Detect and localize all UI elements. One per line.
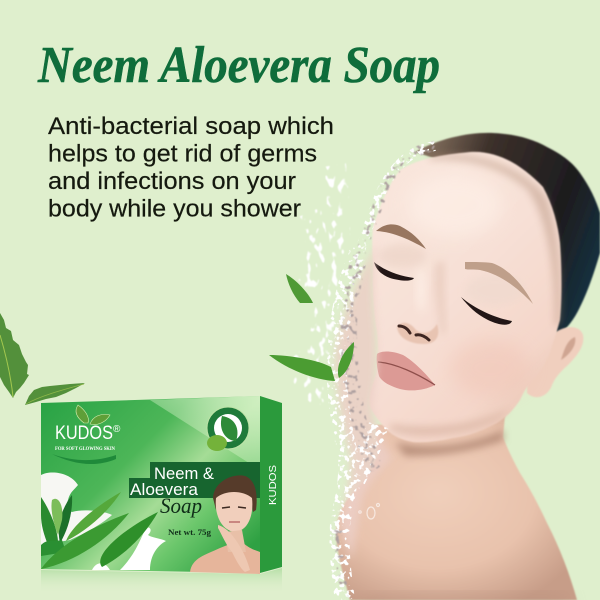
left closed eye	[374, 262, 414, 281]
right closed eye	[461, 297, 512, 325]
nose shade	[435, 262, 446, 335]
product name banner	[129, 462, 260, 498]
water highlights	[337, 146, 435, 600]
inner ear shade	[561, 337, 575, 360]
tagline swoosh	[52, 454, 116, 464]
lips	[377, 351, 435, 390]
chin shade	[390, 408, 510, 436]
nose underside	[397, 323, 438, 344]
shoulder and neck	[336, 415, 577, 600]
neem leaf: floating large	[269, 355, 335, 381]
tagline: FOR SOFT GLOWING SKIN	[55, 447, 115, 452]
milk splash	[41, 472, 112, 545]
soap box product	[41, 396, 282, 594]
left eye socket shade	[378, 244, 426, 268]
description text: Anti-bacterial soap which	[48, 113, 334, 140]
water dark specks	[338, 146, 435, 600]
registered mark: ®	[113, 424, 121, 435]
box side face	[260, 396, 282, 573]
neem leaf: floating top	[286, 274, 313, 303]
box reflection	[41, 568, 282, 594]
product name line two: Aloevera	[130, 480, 199, 499]
forehead highlight	[407, 173, 503, 237]
right eye socket shade	[465, 275, 525, 305]
water splash	[290, 146, 435, 600]
net weight: Net wt. 75g	[168, 527, 212, 537]
soap label: Soap	[160, 493, 202, 518]
box front top right glow	[150, 396, 260, 470]
side brand label: KUDOS	[268, 465, 279, 505]
shoulder lower shading	[360, 596, 570, 600]
splash droplets on shoulder	[359, 504, 380, 519]
description text: helps to get rid of germs	[48, 140, 317, 168]
description text: body while you shower	[48, 196, 301, 222]
description text: and infections on your	[48, 168, 296, 195]
translucent wet sheet	[335, 240, 392, 560]
model on box	[190, 475, 260, 574]
title: Neem Aloevera Soap	[37, 37, 440, 94]
natural badge	[207, 407, 249, 451]
box front face	[41, 396, 260, 573]
nose highlight	[416, 268, 426, 312]
neem leaf: floating small	[338, 342, 354, 378]
brand leaf icon	[76, 405, 110, 425]
lip line	[378, 362, 435, 385]
hairline shade	[430, 154, 560, 325]
neem leaf: left lower	[25, 383, 85, 405]
product name line one: Neem &	[154, 464, 215, 483]
nostrils	[399, 326, 429, 340]
brand name: KUDOS	[55, 423, 113, 444]
aloe and neem leaves on box	[41, 492, 158, 569]
left eyebrow	[376, 224, 426, 249]
neck shadow	[395, 430, 504, 456]
face	[369, 152, 562, 442]
cheek blush	[450, 340, 530, 396]
neem leaf: left top	[0, 313, 29, 398]
hair	[415, 133, 600, 336]
distant spray droplets	[290, 165, 345, 400]
milk splash lower right	[92, 528, 166, 570]
woman's face and shoulder	[336, 133, 600, 600]
right eyebrow	[465, 262, 533, 304]
description text	[48, 113, 334, 222]
ear	[527, 327, 583, 397]
